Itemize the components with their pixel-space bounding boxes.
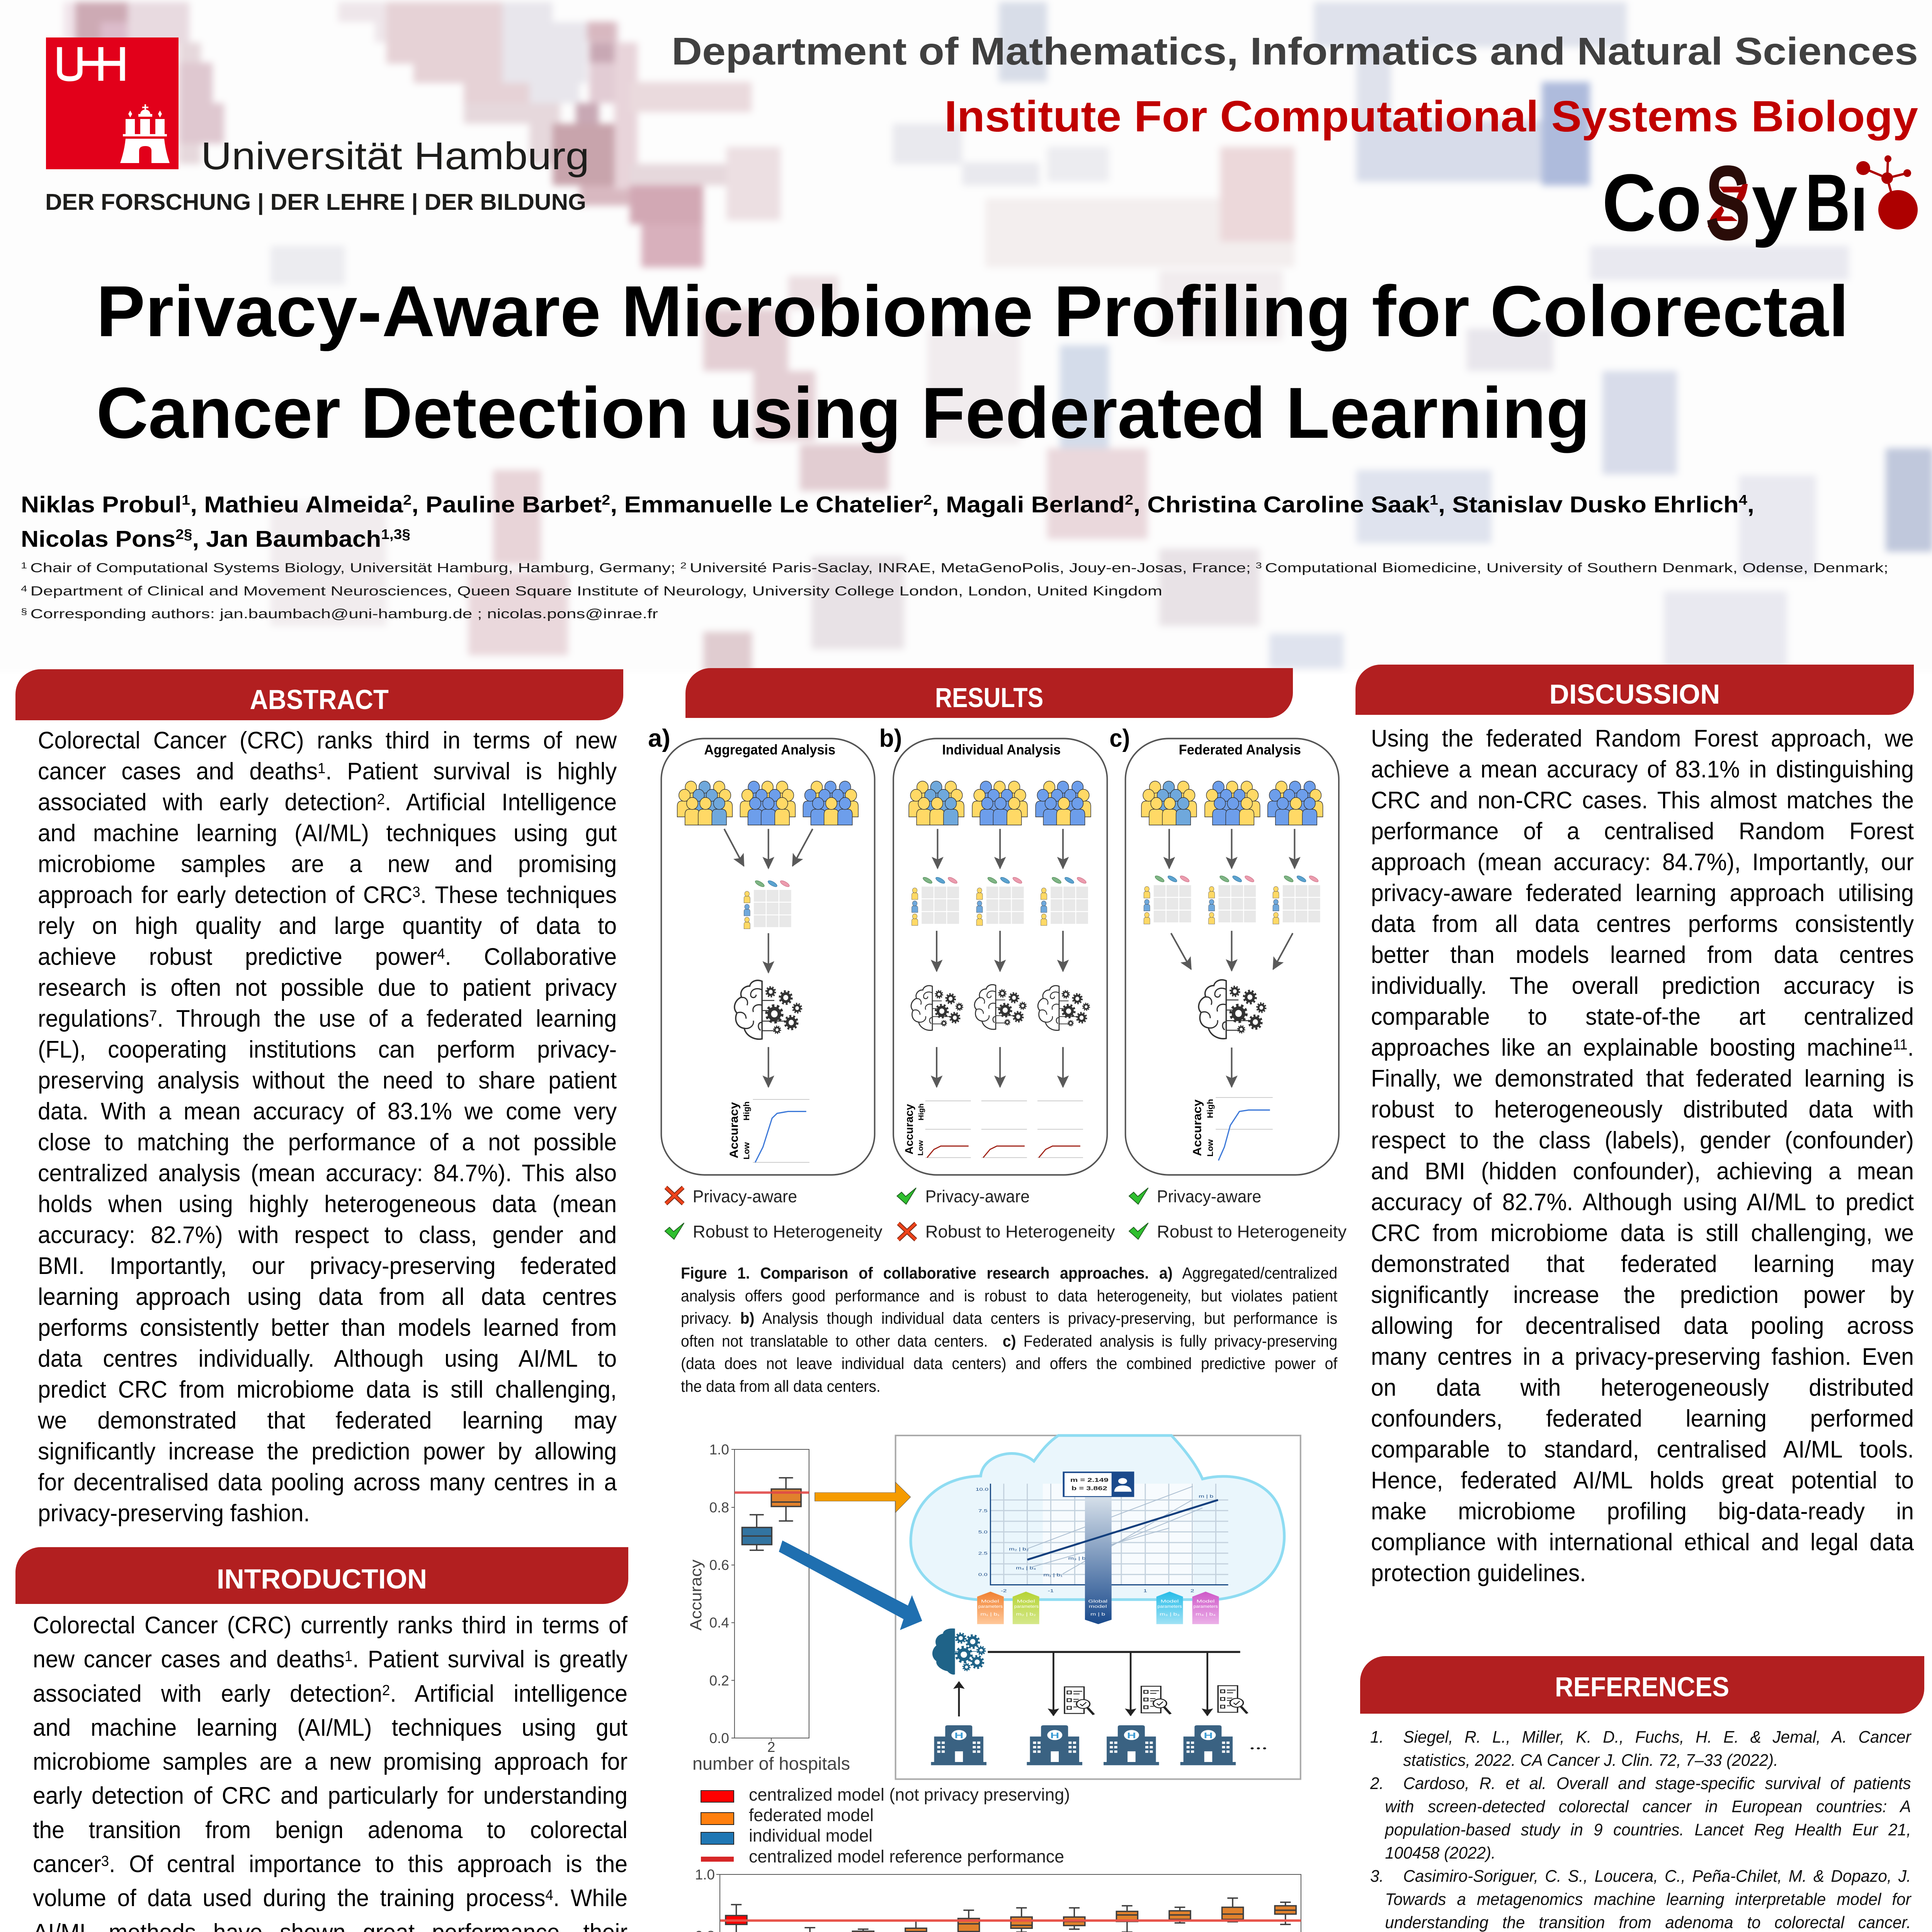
- text: abstract body: cancer cases and deaths1. Patient survival is highly: [38, 758, 617, 785]
- text: abstract body: [38, 725, 617, 1529]
- cloud with linear model: model: [1089, 1604, 1107, 1609]
- affiliations: 4: [21, 584, 31, 594]
- authors: Niklas Probul: [21, 492, 167, 517]
- panel c: federated analysis: c): [1109, 724, 1130, 752]
- text: abstract body: performs consistently better than models learned from: [38, 1315, 617, 1341]
- reference line: [720, 1919, 1301, 1922]
- logo: CoSyBio: Bı: [1805, 157, 1868, 248]
- header banner: [0, 0, 1932, 674]
- authors: , Stanislav Dusko Ehrlich: [1438, 492, 1739, 517]
- example box plot (2 hospitals): 0.8: [709, 1500, 729, 1515]
- example box plot (2 hospitals): Accuracy: [687, 1560, 705, 1631]
- authors: , Emmanuelle Le Chatelier: [610, 492, 923, 517]
- criteria: privacy and robustness marks: Robust to Heterogeneity: [693, 1222, 883, 1242]
- federated evaluation diagram: [896, 1435, 1301, 1779]
- panel c: federated analysis: [1109, 724, 1339, 1175]
- text: abstract body: and machine learning (AI/ML) techniques using gut: [38, 820, 617, 847]
- panel: introduction: [15, 1547, 628, 1932]
- text: introduction body: associated with early detection2. Artificial intelligence: [33, 1680, 628, 1707]
- arrow: blue to hospitals: [779, 1541, 922, 1630]
- panel: abstract: [15, 669, 623, 1535]
- heading: abstract: ABSTRACT: [250, 685, 389, 715]
- text: abstract body: holds when using highly heterogeneous data (mean: [38, 1191, 617, 1218]
- criteria: privacy and robustness marks: Privacy-aware: [693, 1187, 797, 1206]
- text: discussion body: significantly increase the prediction power by: [1371, 1282, 1914, 1308]
- example box plot (2 hospitals): 0.0: [709, 1730, 729, 1746]
- federated boxes: [799, 1898, 1296, 1932]
- text: discussion body: and BMI (hidden confounder), achieving a mean: [1371, 1158, 1914, 1185]
- affiliations: 2: [680, 561, 690, 570]
- list: references: [1370, 1726, 1911, 1932]
- text: discussion body: accuracy of 82.7%. Although using AI/ML to predict: [1371, 1189, 1914, 1216]
- example box plot (2 hospitals): [687, 1442, 850, 1774]
- text: introduction body: early detection of CRC and particularly for understanding: [33, 1782, 628, 1809]
- logo: Universität Hamburg: Universität Hamburg: [201, 134, 589, 178]
- criteria: privacy and robustness marks: Privacy-aware: [925, 1187, 1030, 1206]
- panel c: federated analysis: Low: [1206, 1139, 1215, 1156]
- cloud with linear model: m₂ | b₂: [1009, 1547, 1029, 1552]
- logo: CoSyBio: y: [1752, 156, 1798, 248]
- text: discussion body: privacy-aware federated learning approach utilising: [1371, 880, 1914, 906]
- title: Privacy-Aware Microbiome Profiling for Colorectal: [96, 271, 1849, 352]
- cloud with linear model: m | b: [1199, 1494, 1213, 1499]
- authors: 2: [923, 492, 932, 508]
- text: discussion body: approaches like an explainable boosting machine11.: [1371, 1034, 1914, 1061]
- institute heading: Institute For Computational Systems Biology: [944, 92, 1918, 141]
- example box plot (2 hospitals): 0.2: [709, 1673, 729, 1689]
- distribution bus with arrows: [959, 1652, 1240, 1716]
- cloud with linear model: -2: [1001, 1588, 1007, 1594]
- text: abstract body: predict CRC from microbiome data is still challenging,: [38, 1376, 617, 1403]
- text: discussion body: better than models learned from data centres: [1371, 942, 1914, 968]
- legend: individual model: [749, 1826, 872, 1845]
- heading: results: RESULTS: [935, 683, 1043, 713]
- affiliations: 1: [21, 561, 30, 570]
- panel b: individual analysis: Low: [917, 1140, 925, 1156]
- cloud with linear model: m₃ | b₃: [1160, 1612, 1180, 1617]
- centralized box: [726, 1905, 747, 1932]
- text: discussion body: allowing for decentralised data pooling across: [1371, 1313, 1914, 1339]
- heading: abstract: [15, 669, 623, 720]
- cloud with linear model: -1: [1048, 1588, 1054, 1594]
- text: abstract body: significantly increase the prediction power by allowing: [38, 1438, 617, 1465]
- cloud with linear model: m₄ | b₄: [1196, 1612, 1216, 1617]
- cloud with linear model: 5.0: [978, 1530, 988, 1535]
- cloud with linear model: parameters: [1014, 1604, 1039, 1609]
- affiliations: Université Paris-Saclay, INRAE, MetaGenoPolis, Jouy-en-Josas, France;: [690, 561, 1256, 575]
- text: abstract body: learning approach using data from all data centres: [38, 1284, 617, 1310]
- text: abstract body: data. With a mean accuracy of 83.1% we come very: [38, 1098, 617, 1125]
- panel: discussion: [1355, 665, 1914, 1588]
- cloud with linear model: 0.0: [978, 1572, 988, 1577]
- cloud with linear model: b = 3.862: [1071, 1485, 1107, 1492]
- text: introduction body: new cancer cases and deaths1. Patient survival is greatly: [33, 1646, 628, 1673]
- text: discussion body: make microbiome profiling big-data-ready in: [1371, 1498, 1914, 1525]
- heading: introduction: INTRODUCTION: [217, 1564, 427, 1595]
- authors: [21, 492, 1754, 552]
- text: discussion body: Finally, we demonstrated that federated learning is: [1371, 1065, 1914, 1092]
- text: discussion body: performance of a centralised Random Forest: [1371, 818, 1914, 845]
- text: discussion body: achieve a mean accuracy of 83.1% in distinguishing: [1371, 756, 1914, 783]
- logo: CoSyBio: S: [1705, 144, 1750, 262]
- authors: , Pauline Barbet: [412, 492, 602, 517]
- panel b: individual analysis: Accuracy: [903, 1104, 916, 1155]
- text: discussion body: individually. The overall prediction accuracy is: [1371, 973, 1914, 999]
- panel a: aggregated analysis: a): [648, 724, 670, 752]
- box plot: accuracy versus number of hospitals: 1.0: [695, 1867, 715, 1883]
- cloud with linear model: Model: [1017, 1599, 1035, 1604]
- authors: 1,3§: [381, 526, 410, 542]
- authors: 4: [1739, 492, 1747, 508]
- cloud with linear model: m | b: [1090, 1612, 1105, 1617]
- text: introduction body: Colorectal Cancer (CRC) currently ranks third in terms of: [33, 1612, 628, 1639]
- cloud with linear model: m₂ | b₂: [1016, 1612, 1036, 1617]
- text: discussion body: comparable to standard, centralised AI/ML tools.: [1371, 1436, 1914, 1463]
- list: references: Casimiro-Soriguer, C. S., Loucera, C., Peña-Chilet, M. & Dopazo, J.: [1403, 1867, 1911, 1886]
- text: introduction body: volume of data used during the training process4. While: [33, 1885, 628, 1912]
- authors: Nicolas Pons: [21, 526, 164, 552]
- panel a: aggregated analysis: High: [742, 1101, 751, 1121]
- authors: , Jan Baumbach: [192, 526, 381, 552]
- text: introduction body: and machine learning (AI/ML) techniques using gut: [33, 1714, 628, 1741]
- evaluation checklists: [1065, 1685, 1247, 1714]
- text: discussion body: CRC from microbiome data is still challenging, we: [1371, 1220, 1914, 1247]
- affiliations: [21, 561, 1888, 621]
- title: [96, 271, 1849, 453]
- panel b: individual analysis: [879, 724, 1107, 1175]
- heading: references: REFERENCES: [1555, 1672, 1730, 1702]
- text: discussion body: [1371, 723, 1914, 1589]
- text: discussion body: comparable to state-of-the art centralized: [1371, 1003, 1914, 1030]
- text: abstract body: Colorectal Cancer (CRC) ranks third in terms of new: [38, 727, 617, 754]
- text: abstract body: research is often not possible due to patient privacy: [38, 975, 617, 1001]
- authors: 2: [1125, 492, 1133, 508]
- list: references: Cardoso, R. et al. Overall and stage-specific survival of patients: [1403, 1774, 1911, 1793]
- criteria: privacy and robustness marks: Robust to Heterogeneity: [925, 1222, 1115, 1242]
- text: abstract body: (FL), cooperating institutions can perform privacy-: [38, 1036, 617, 1063]
- caption: figure 1: analysis offers good performance and is robust to data heterogeneity, but violates patient: [681, 1287, 1337, 1305]
- authors: 2: [403, 492, 412, 508]
- list: references: population-based study in 9 countries. Lancet Reg Health Eur 21,: [1385, 1820, 1911, 1839]
- affiliations: Corresponding authors: jan.baumbach@uni-hamburg.de ; nicolas.pons@inrae.fr: [31, 607, 658, 621]
- cloud with linear model: Model: [1197, 1599, 1215, 1604]
- text: discussion body: many centres in a privacy-preserving fashion. Even: [1371, 1344, 1914, 1370]
- example box plot (2 hospitals): number of hospitals: [692, 1753, 850, 1774]
- text: discussion body: Hence, federated AI/ML holds great potential to: [1371, 1467, 1914, 1494]
- arrow: orange to cloud: [815, 1482, 911, 1512]
- panel: references: [1360, 1656, 1924, 1932]
- caption: figure 1: often not translatable to other data centers. c) Federated analysis is fully privacy-preserving: [681, 1332, 1337, 1350]
- caption: figure 1: privacy. b) Analysis though individual data centers is privacy-preserving, but performance is: [681, 1309, 1337, 1327]
- text: abstract body: close to matching the performance of a not possible: [38, 1129, 617, 1156]
- heading: results: [685, 668, 1293, 718]
- figure 2: federated performance validation: [657, 1430, 1314, 1932]
- text: abstract body: we demonstrated that federated learning may: [38, 1407, 617, 1434]
- authors: , Christina Caroline Saak: [1133, 492, 1430, 517]
- cloud with linear model: m₁ | b₁: [1043, 1573, 1063, 1577]
- authors: 2§: [175, 526, 192, 542]
- authors: ,: [1747, 492, 1754, 517]
- logo: CoSyBio: Co: [1602, 157, 1702, 248]
- caption: figure 1: (data does not leave individual data centers) and offers the combined predictive power of: [681, 1354, 1337, 1372]
- authors: , Mathieu Almeida: [190, 492, 403, 517]
- list: references: statistics, 2022. CA Cancer J. Clin. 72, 7–33 (2022).: [1403, 1751, 1778, 1770]
- legend: federated model: [749, 1805, 874, 1825]
- heading: discussion: [1355, 665, 1914, 715]
- text: discussion body: data from all data centres performs consistently: [1371, 911, 1914, 937]
- legend: centralized model reference performance: [749, 1847, 1064, 1866]
- text: discussion body: on data with heterogeneously distributed: [1371, 1374, 1914, 1401]
- text: abstract body: regulations7. Through the use of a federated learning: [38, 1005, 617, 1032]
- text: introduction body: [33, 1609, 628, 1932]
- text: abstract body: preserving analysis without the need to share patient: [38, 1067, 617, 1094]
- text: discussion body: approach (mean accuracy: 84.7%), Importantly, our: [1371, 849, 1914, 876]
- example box plot (2 hospitals): 2: [767, 1739, 775, 1755]
- authors: 2: [602, 492, 610, 508]
- heading: introduction: [15, 1547, 628, 1604]
- example box plot (2 hospitals): 1.0: [709, 1442, 729, 1458]
- text: abstract body: microbiome samples are a new and promising: [38, 851, 617, 878]
- list: references: understanding the transition from adenoma to colorectal cancer.: [1385, 1913, 1911, 1932]
- legend: [701, 1785, 1070, 1866]
- cloud with linear model: 10.0: [976, 1487, 988, 1492]
- text: discussion body: compliance with international ethical and legal data: [1371, 1529, 1914, 1556]
- department heading: Department of Mathematics, Informatics and Natural Sciences: [672, 30, 1918, 73]
- background mosaic: [0, 0, 1932, 674]
- text: discussion body: confounders, federated learning performed: [1371, 1405, 1914, 1432]
- cloud with linear model: Model: [1161, 1599, 1179, 1604]
- criteria: privacy and robustness marks: Robust to Heterogeneity: [1157, 1222, 1347, 1242]
- panel c: federated analysis: High: [1206, 1099, 1215, 1118]
- cloud with linear model: 2.5: [978, 1551, 988, 1556]
- text: discussion body: robust to heterogeneously distributed data with: [1371, 1096, 1914, 1123]
- panel b: individual analysis: High: [917, 1104, 925, 1121]
- box plot: accuracy versus number of hospitals: [670, 1867, 1301, 1932]
- list: references: 1.: [1370, 1728, 1384, 1747]
- text: discussion body: CRC and non-CRC cases. This almost matches the: [1371, 787, 1914, 814]
- logo: Universität Hamburg: [45, 37, 589, 215]
- text: abstract body: BMI. Importantly, our privacy-preserving federated: [38, 1253, 617, 1279]
- cloud with linear model: parameters: [1158, 1604, 1182, 1609]
- cloud with linear model: m₄ | b₄: [1016, 1566, 1036, 1571]
- panel a: aggregated analysis: Aggregated Analysis: [704, 742, 835, 758]
- cloud with linear model: 2: [1190, 1588, 1194, 1594]
- text: introduction body: the transition from benign adenoma to colorectal: [33, 1817, 628, 1844]
- cloud with linear model: Model: [981, 1599, 999, 1604]
- text: abstract body: achieve robust predictive power4. Collaborative: [38, 944, 617, 970]
- affiliations: 3: [1256, 561, 1265, 570]
- figure 1: collaborative research approaches: [641, 723, 1356, 1256]
- text: discussion body: Using the federated Random Forest approach, we: [1371, 725, 1914, 752]
- panel b: individual analysis: b): [879, 724, 902, 752]
- panel a: aggregated analysis: Low: [742, 1142, 751, 1160]
- legend: centralized model (not privacy preserving): [749, 1785, 1070, 1804]
- cloud with linear model: m = 2.149: [1070, 1477, 1109, 1483]
- caption: figure 1: [681, 1262, 1337, 1398]
- authors: 1: [182, 492, 190, 508]
- logo: CoSyBio: [1602, 144, 1918, 262]
- affiliations: Chair of Computational Systems Biology, Universität Hamburg, Hamburg, Germany;: [30, 561, 680, 575]
- authors: 1: [1430, 492, 1438, 508]
- panel a: aggregated analysis: Accuracy: [727, 1102, 740, 1158]
- list: references: 100458 (2022).: [1385, 1844, 1496, 1862]
- panel: results: [641, 668, 1356, 1932]
- cloud with linear model: parameters: [978, 1604, 1003, 1609]
- cloud with linear model: Global: [1088, 1599, 1107, 1604]
- panel c: federated analysis: Accuracy: [1190, 1099, 1204, 1156]
- heading: discussion: DISCUSSION: [1549, 679, 1720, 710]
- panel b: individual analysis: Individual Analysis: [942, 742, 1061, 758]
- list: references: 2.: [1370, 1774, 1384, 1793]
- brain icon with gears: [932, 1628, 985, 1675]
- text: discussion body: respect to the class (labels), gender (confounder): [1371, 1127, 1914, 1154]
- text: discussion body: protection guidelines.: [1371, 1560, 1586, 1587]
- list: references: Siegel, R. L., Miller, K. D., Fuchs, H. E. & Jemal, A. Cancer: [1403, 1728, 1911, 1747]
- panel c: federated analysis: Federated Analysis: [1179, 742, 1301, 758]
- affiliations: Computational Biomedicine, University of Southern Denmark, Odense, Denmark;: [1265, 561, 1888, 575]
- logo: Universität Hamburg: DER FORSCHUNG | DER LEHRE | DER BILDUNG: [45, 189, 586, 215]
- text: abstract body: for decentralised data pooling across many centres in a: [38, 1469, 617, 1496]
- caption: figure 1: Figure 1. Comparison of collaborative research approaches. a) Aggregated/centralized: [681, 1264, 1337, 1282]
- affiliations: §: [21, 607, 31, 616]
- cloud with linear model: m₃ | b₃: [1068, 1556, 1088, 1561]
- text: abstract body: centralized analysis (mean accuracy: 84.7%). This also: [38, 1160, 617, 1187]
- panel a: aggregated analysis: [648, 724, 875, 1175]
- list: references: 3.: [1370, 1867, 1384, 1886]
- text: abstract body: privacy-preserving fashion.: [38, 1500, 310, 1527]
- text: discussion body: demonstrated that federated learning may: [1371, 1251, 1914, 1277]
- criteria: privacy and robustness marks: Privacy-aware: [1157, 1187, 1261, 1206]
- text: abstract body: approach for early detection of CRC3. These techniques: [38, 882, 617, 908]
- title: Cancer Detection using Federated Learning: [96, 372, 1590, 453]
- list: references: Towards a metagenomics machine learning interpretable model for: [1385, 1890, 1911, 1909]
- cloud with linear model: 1: [1143, 1588, 1147, 1594]
- example box plot (2 hospitals): 0.6: [709, 1557, 729, 1573]
- authors: , Magali Berland: [932, 492, 1125, 517]
- text: abstract body: rely on high quality and large quantity of data to: [38, 913, 617, 939]
- affiliations: Department of Clinical and Movement Neurosciences, Queen Square Institute of Neurology, University College London, London, United Kingdom: [31, 584, 1162, 599]
- logo mark: [46, 37, 179, 169]
- text: introduction body: microbiome samples are a new promising approach for: [33, 1748, 628, 1775]
- hospital icons: [931, 1725, 1266, 1765]
- cloud with linear model: parameters: [1194, 1604, 1218, 1609]
- text: abstract body: associated with early detection2. Artificial Intelligence: [38, 789, 617, 816]
- criteria: privacy and robustness marks: [665, 1187, 1347, 1242]
- heading: references: [1360, 1656, 1924, 1714]
- caption: figure 1: the data from all data centers.: [681, 1377, 881, 1395]
- list: references: with screen-detected colorectal cancer in European countries: A: [1385, 1797, 1911, 1816]
- cloud with linear model: [911, 1435, 1284, 1624]
- cloud with linear model: m₁ | b₁: [980, 1612, 1000, 1617]
- text: abstract body: accuracy: 82.7%) with respect to class, gender and: [38, 1222, 617, 1248]
- example box plot (2 hospitals): 0.4: [709, 1615, 729, 1631]
- text: introduction body: cancer3. Of central importance to this approach is the: [33, 1851, 628, 1878]
- text: abstract body: data centres individually. Although using AI/ML to: [38, 1345, 617, 1372]
- cloud with linear model: 7.5: [978, 1509, 988, 1513]
